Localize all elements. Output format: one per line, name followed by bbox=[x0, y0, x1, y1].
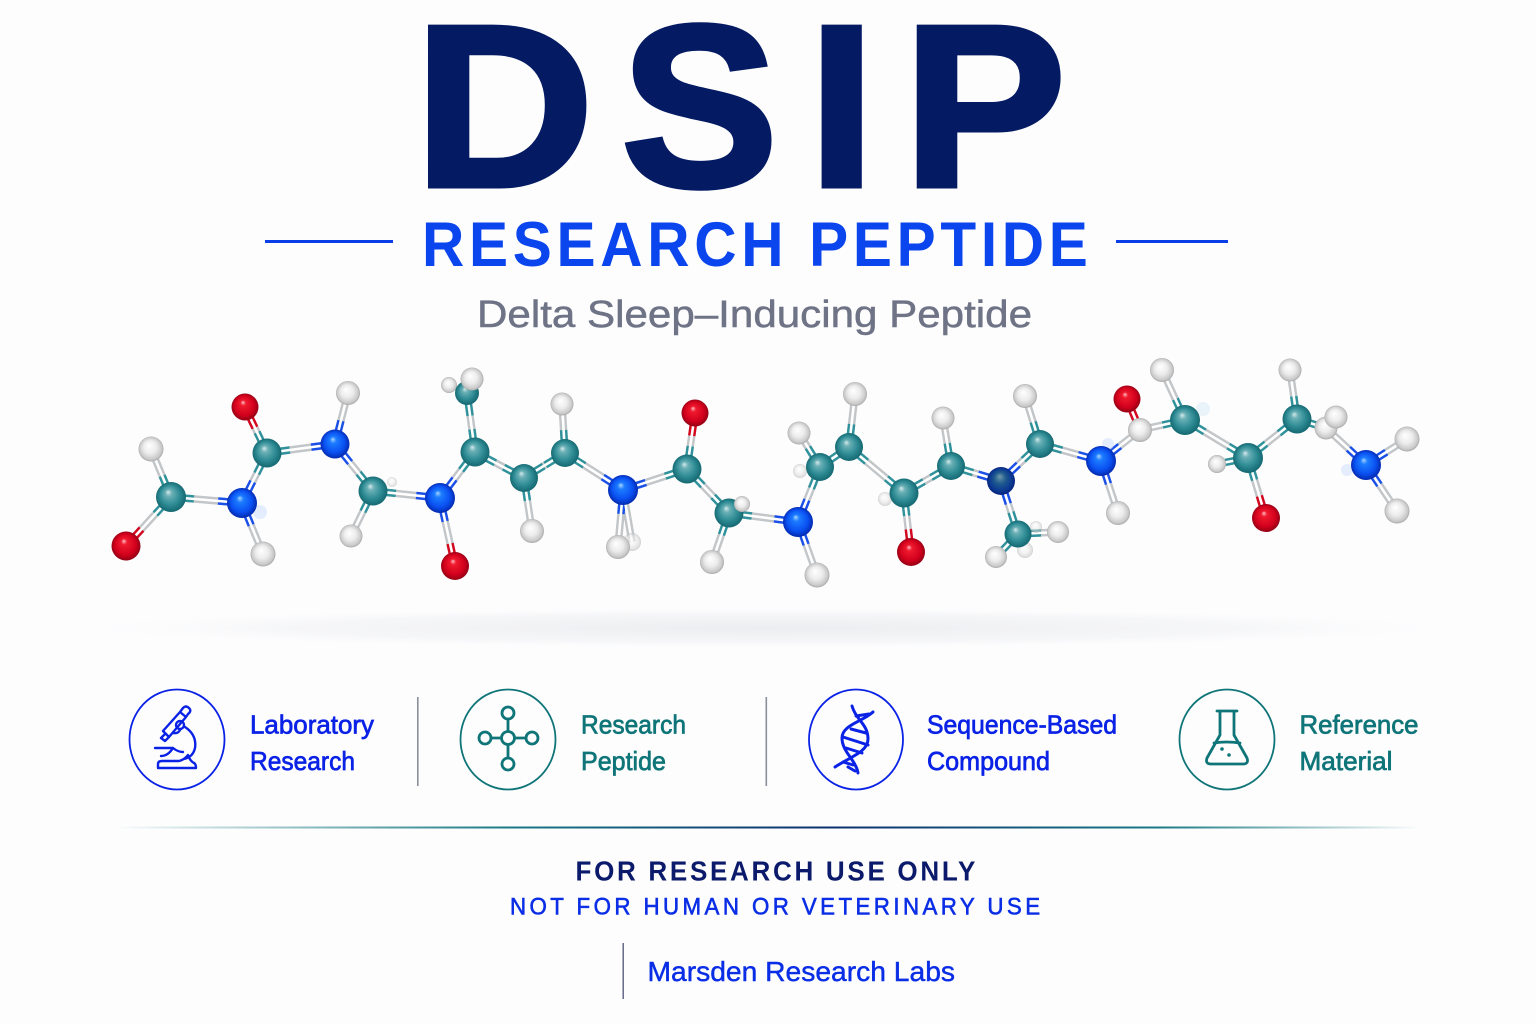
feature: laboratory research bbox=[130, 690, 374, 790]
label: Material bbox=[1300, 746, 1392, 776]
label bbox=[1300, 710, 1418, 776]
icon: flask bbox=[1180, 690, 1274, 790]
label bbox=[250, 710, 374, 776]
icon: microscope bbox=[130, 690, 224, 790]
icon: DNA helix bbox=[809, 690, 903, 790]
subtitle: Delta Sleep–Inducing Peptide bbox=[477, 294, 1032, 336]
icon: molecule nodes bbox=[460, 690, 556, 790]
notice: for research use only: FOR RESEARCH USE ONLY bbox=[576, 856, 975, 887]
label: Compound bbox=[927, 746, 1050, 776]
label bbox=[581, 710, 686, 776]
notice: not for human or veterinary use: NOT FOR HUMAN OR VETERINARY USE bbox=[510, 893, 1040, 920]
hidden pale hydrogens bbox=[253, 402, 1353, 558]
divider bbox=[417, 697, 419, 786]
title: DSIP bbox=[414, 0, 1066, 236]
label: Sequence-Based bbox=[927, 710, 1117, 740]
hydrogen atoms bbox=[138, 358, 1420, 588]
bonds bbox=[126, 370, 1407, 575]
divider bbox=[766, 697, 767, 786]
feature: sequence-based compound bbox=[809, 690, 1117, 790]
label: Research bbox=[250, 746, 355, 776]
label: Laboratory bbox=[250, 710, 374, 740]
label: Reference bbox=[1300, 710, 1418, 740]
front hydrogens bbox=[460, 368, 750, 512]
feature: research peptide bbox=[460, 690, 686, 790]
label: Peptide bbox=[581, 746, 666, 776]
oxygen atoms bbox=[112, 386, 1280, 580]
carbon atoms bbox=[156, 381, 1312, 548]
heading: research peptide with side rules: RESEARCH PEPTIDE bbox=[422, 209, 1088, 279]
footer gradient rule bbox=[115, 826, 1420, 828]
feature: reference material bbox=[1180, 690, 1418, 790]
heading: research peptide with side rules bbox=[265, 209, 1228, 279]
label bbox=[927, 710, 1117, 776]
brand: Marsden Research Labs: Marsden Research Labs bbox=[648, 956, 955, 987]
molecule ground shadow bbox=[95, 608, 1435, 648]
peptide molecule bbox=[112, 358, 1420, 588]
nitrogen atoms bbox=[227, 430, 1381, 537]
label: Research bbox=[581, 710, 686, 740]
